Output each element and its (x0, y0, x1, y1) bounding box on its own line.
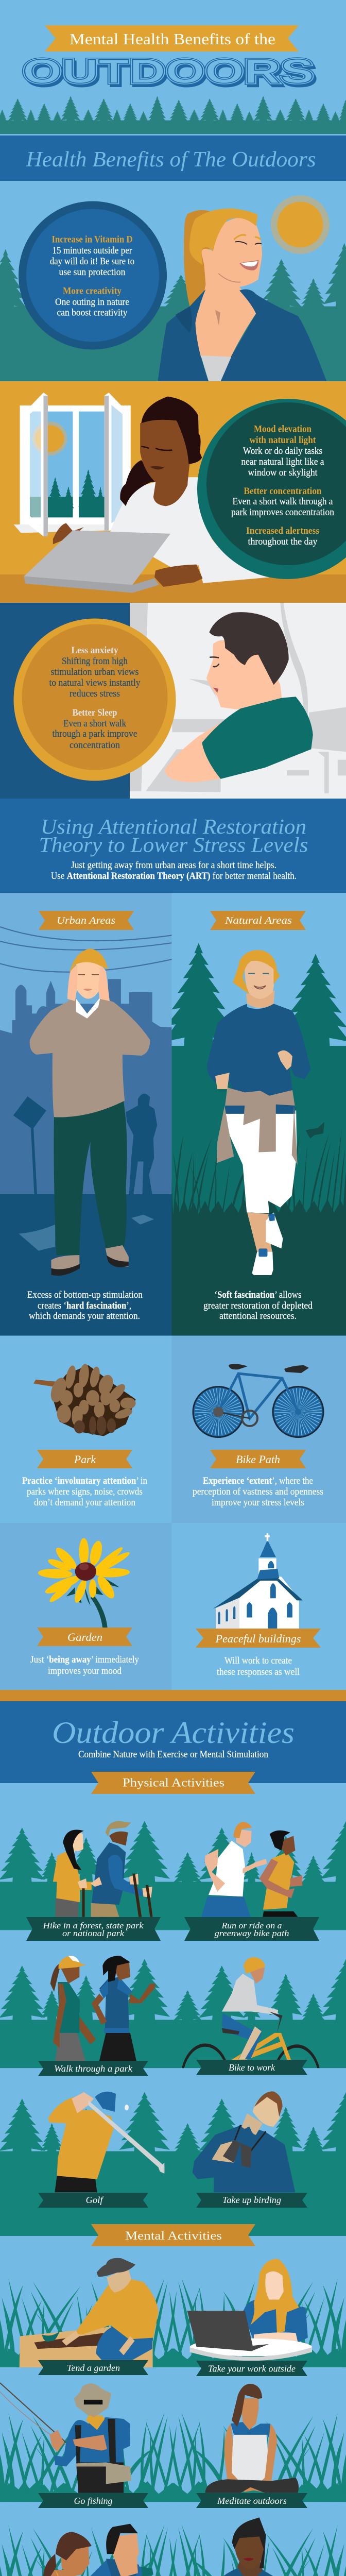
banner: Mental Health Benefits of the (70, 30, 275, 48)
text: park: don’t demand your attention (34, 1498, 135, 1508)
ribbon: bike path: Bike Path (236, 1453, 280, 1466)
caption: natural: attentional resources. (219, 1311, 297, 1321)
banner (45, 25, 299, 52)
panel: garden (0, 1523, 172, 1690)
illustration: woman with laptop (24, 397, 271, 593)
illustration: picnic couple (33, 2524, 171, 2576)
caption: natural: ‘Soft fascination’ allows (214, 1290, 302, 1300)
illustration: runners (201, 1822, 302, 1917)
ribbon: bike path (210, 1450, 306, 1468)
callout circle: Mood elevation (254, 425, 312, 435)
icon: church (213, 1533, 303, 1629)
illustration: gardener (20, 2258, 159, 2367)
treeline (0, 96, 346, 134)
ribbon: meditate (196, 2493, 307, 2508)
illustration: stressed man (19, 948, 154, 1276)
forest background (0, 243, 346, 382)
ribbon: mental activities: Mental Activities (125, 2229, 222, 2242)
panel: mental activities (0, 2224, 346, 2576)
ribbon: meditate: Meditate outdoors (217, 2496, 287, 2506)
callout circle: throughout the day (248, 537, 318, 547)
text: bike path: improve your stress levels (212, 1498, 304, 1508)
illustration: walkers (50, 1956, 155, 2061)
callout circle: concentration (70, 740, 120, 751)
caption: urban (27, 1290, 143, 1321)
heading: attentional restoration theory: Use Attentional Restoration Theory (ART) for better mental health. (51, 871, 297, 882)
caption: urban: which demands your attention. (29, 1311, 140, 1321)
heading: attentional restoration theory: Theory to Lower Stress Levels (39, 833, 308, 856)
ribbon: physical activities: Physical Activities (123, 1776, 224, 1789)
icon: bicycle (193, 1364, 323, 1437)
ribbon: garden: Garden (67, 1631, 102, 1643)
callout circle: Increase in Vitamin D (51, 235, 133, 245)
panel: urban areas (0, 893, 172, 1336)
title: outdoors: OUTDOORS (25, 55, 316, 93)
text: garden (30, 1655, 140, 1676)
ribbon: run: Run or ride on a (221, 1921, 282, 1930)
callout circle: Even a short walk through a (233, 497, 333, 507)
callout circle: can boost creativity (57, 308, 128, 318)
heading: attentional restoration theory (0, 799, 346, 893)
text: garden: Just ‘being away’ immediately (30, 1655, 140, 1665)
callout circle (19, 201, 167, 349)
callout circle (13, 618, 176, 781)
ribbon: hike: or national park (62, 1928, 124, 1938)
text: peaceful buildings (217, 1656, 300, 1677)
ribbon: fishing: Go fishing (74, 2496, 112, 2506)
heading: outdoor activities: Combine Nature with Exercise or Mental Stimulation (78, 1750, 268, 1760)
grass rows (0, 2278, 346, 2576)
title: outdoors (23, 52, 316, 93)
illustration: open window (14, 393, 131, 536)
illustration: fisherman (0, 2383, 131, 2493)
title: outdoors: OUTDOORS (23, 52, 314, 90)
ribbon: birding: Take up birding (222, 2195, 281, 2205)
panel: vitamin D and creativity (0, 181, 346, 382)
text: park: parks where signs, noise, crowds (27, 1487, 143, 1497)
callout circle: Even a short walk (63, 719, 127, 729)
ribbon: hike: Hike in a forest, state park (42, 1921, 144, 1930)
ribbon: peaceful buildings (196, 1629, 321, 1648)
callout circle: Work or do daily tasks (243, 446, 322, 456)
ribbon: garden (38, 2360, 148, 2375)
caption: urban: creates ‘hard fascination’, (38, 1301, 131, 1311)
text: bike path: Experience ‘extent’, where the (203, 1476, 313, 1486)
forest rows (0, 1821, 346, 2236)
ribbon: bike to work: Bike to work (229, 2062, 275, 2073)
callout circle: Shifting from high (62, 656, 128, 667)
ribbon: urban areas (39, 911, 134, 930)
callout circle: near natural light like a (241, 457, 324, 467)
ribbon: walk (38, 2061, 148, 2076)
heading: attentional restoration theory: Using Attentional Restoration (41, 815, 306, 838)
illustration: jogging woman (207, 950, 324, 1275)
panel: peaceful buildings (172, 1523, 346, 1690)
panel: title header (0, 0, 346, 135)
caption: natural: greater restoration of depleted (203, 1301, 313, 1311)
callout circle: stimulation urban views (50, 667, 139, 677)
ribbon: fishing (38, 2493, 148, 2508)
ribbon: walk: Walk through a park (54, 2063, 133, 2074)
callout circle: Better Sleep (72, 708, 117, 718)
callout circle: window or skylight (248, 468, 318, 478)
panel: natural areas (163, 893, 346, 1336)
illustration: smiling blonde woman (158, 209, 326, 381)
illustration: birdwatcher (193, 2091, 295, 2192)
illustration: meditating woman (205, 2384, 299, 2493)
illustration: trees and grass (163, 943, 346, 1221)
panel: park (0, 1335, 172, 1523)
ribbon: natural areas (210, 911, 306, 930)
text: park (22, 1476, 147, 1508)
heading: outdoor activities (0, 1690, 346, 1783)
callout circle: through a park improve (53, 729, 137, 739)
text: peaceful buildings: these responses as well (217, 1667, 300, 1677)
caption: urban: Excess of bottom-up stimulation (27, 1290, 143, 1300)
ribbon: mental activities (91, 2224, 255, 2246)
caption: natural (203, 1290, 313, 1321)
panel: sleep (0, 603, 346, 799)
panel: bike path (172, 1335, 346, 1523)
icon: sun (271, 195, 330, 254)
ribbon: birding (196, 2193, 307, 2208)
callout circle: 15 minutes outside per (53, 246, 132, 256)
icon: flower (38, 1538, 131, 1628)
ribbon: garden: Tend a garden (67, 2363, 120, 2373)
ribbon: park: Park (74, 1453, 96, 1466)
callout circle: with natural light (249, 435, 316, 446)
ribbon: bike to work (196, 2060, 307, 2075)
heading: health benefits (0, 134, 346, 181)
ribbon: golf (38, 2193, 148, 2208)
callout circle: day will do it! Be sure to (50, 257, 134, 267)
ribbon: natural areas: Natural Areas (224, 915, 292, 926)
illustration: city background (0, 927, 171, 1194)
illustration: woman reading (205, 2517, 293, 2576)
panel: natural light (0, 381, 346, 603)
text: garden: improves your mood (48, 1666, 122, 1676)
callout circle: Better concentration (244, 486, 322, 497)
title: outdoors: OUTDOORS (23, 52, 314, 90)
ribbon: garden (37, 1628, 132, 1646)
callout circle: Increased alertness (246, 526, 319, 536)
text: peaceful buildings: Will work to create (224, 1656, 292, 1666)
ribbon: work outside: Take your work outside (208, 2364, 296, 2374)
text: park: Practice ‘involuntary attention’ in (22, 1476, 147, 1486)
icon: pine cone (33, 1363, 136, 1436)
ribbon: park (37, 1450, 132, 1468)
callout circle: park improves concentration (231, 507, 334, 518)
callout circle: reduces stress (70, 689, 120, 699)
callout circle: use sun protection (59, 267, 126, 278)
illustration: woman on laptop (187, 2259, 312, 2361)
ribbon: run (184, 1917, 319, 1941)
heading: health benefits: Health Benefits of The Outdoors (25, 148, 316, 172)
illustration: cyclist (181, 1957, 320, 2116)
ribbon: run: greenway bike path (214, 1928, 289, 1938)
illustration: sleeping man (130, 603, 346, 793)
callout circle (197, 399, 346, 579)
panel: physical activities (0, 1772, 346, 2236)
callout circle: Less anxiety (71, 646, 118, 656)
ribbon: physical activities (91, 1772, 255, 1794)
ribbon: golf: Golf (85, 2195, 105, 2205)
title: outdoors: OUTDOORS (23, 52, 314, 90)
text: bike path (193, 1476, 323, 1508)
callout circle: One outing in nature (55, 297, 129, 308)
ribbon: urban areas: Urban Areas (57, 915, 115, 926)
ribbon: hike (26, 1917, 161, 1941)
ribbon: peaceful buildings: Peaceful buildings (215, 1632, 301, 1645)
heading: attentional restoration theory: Just getting away from urban areas for a short time helps. (71, 860, 276, 871)
illustration: golfer (48, 2092, 164, 2192)
illustration: hikers (53, 1821, 153, 1917)
text: bike path: perception of vastness and openness (193, 1487, 323, 1497)
callout circle: More creativity (63, 286, 122, 297)
ribbon: work outside (196, 2361, 307, 2376)
heading: outdoor activities: Outdoor Activities (52, 1716, 295, 1750)
callout circle: to natural views instantly (49, 678, 141, 688)
